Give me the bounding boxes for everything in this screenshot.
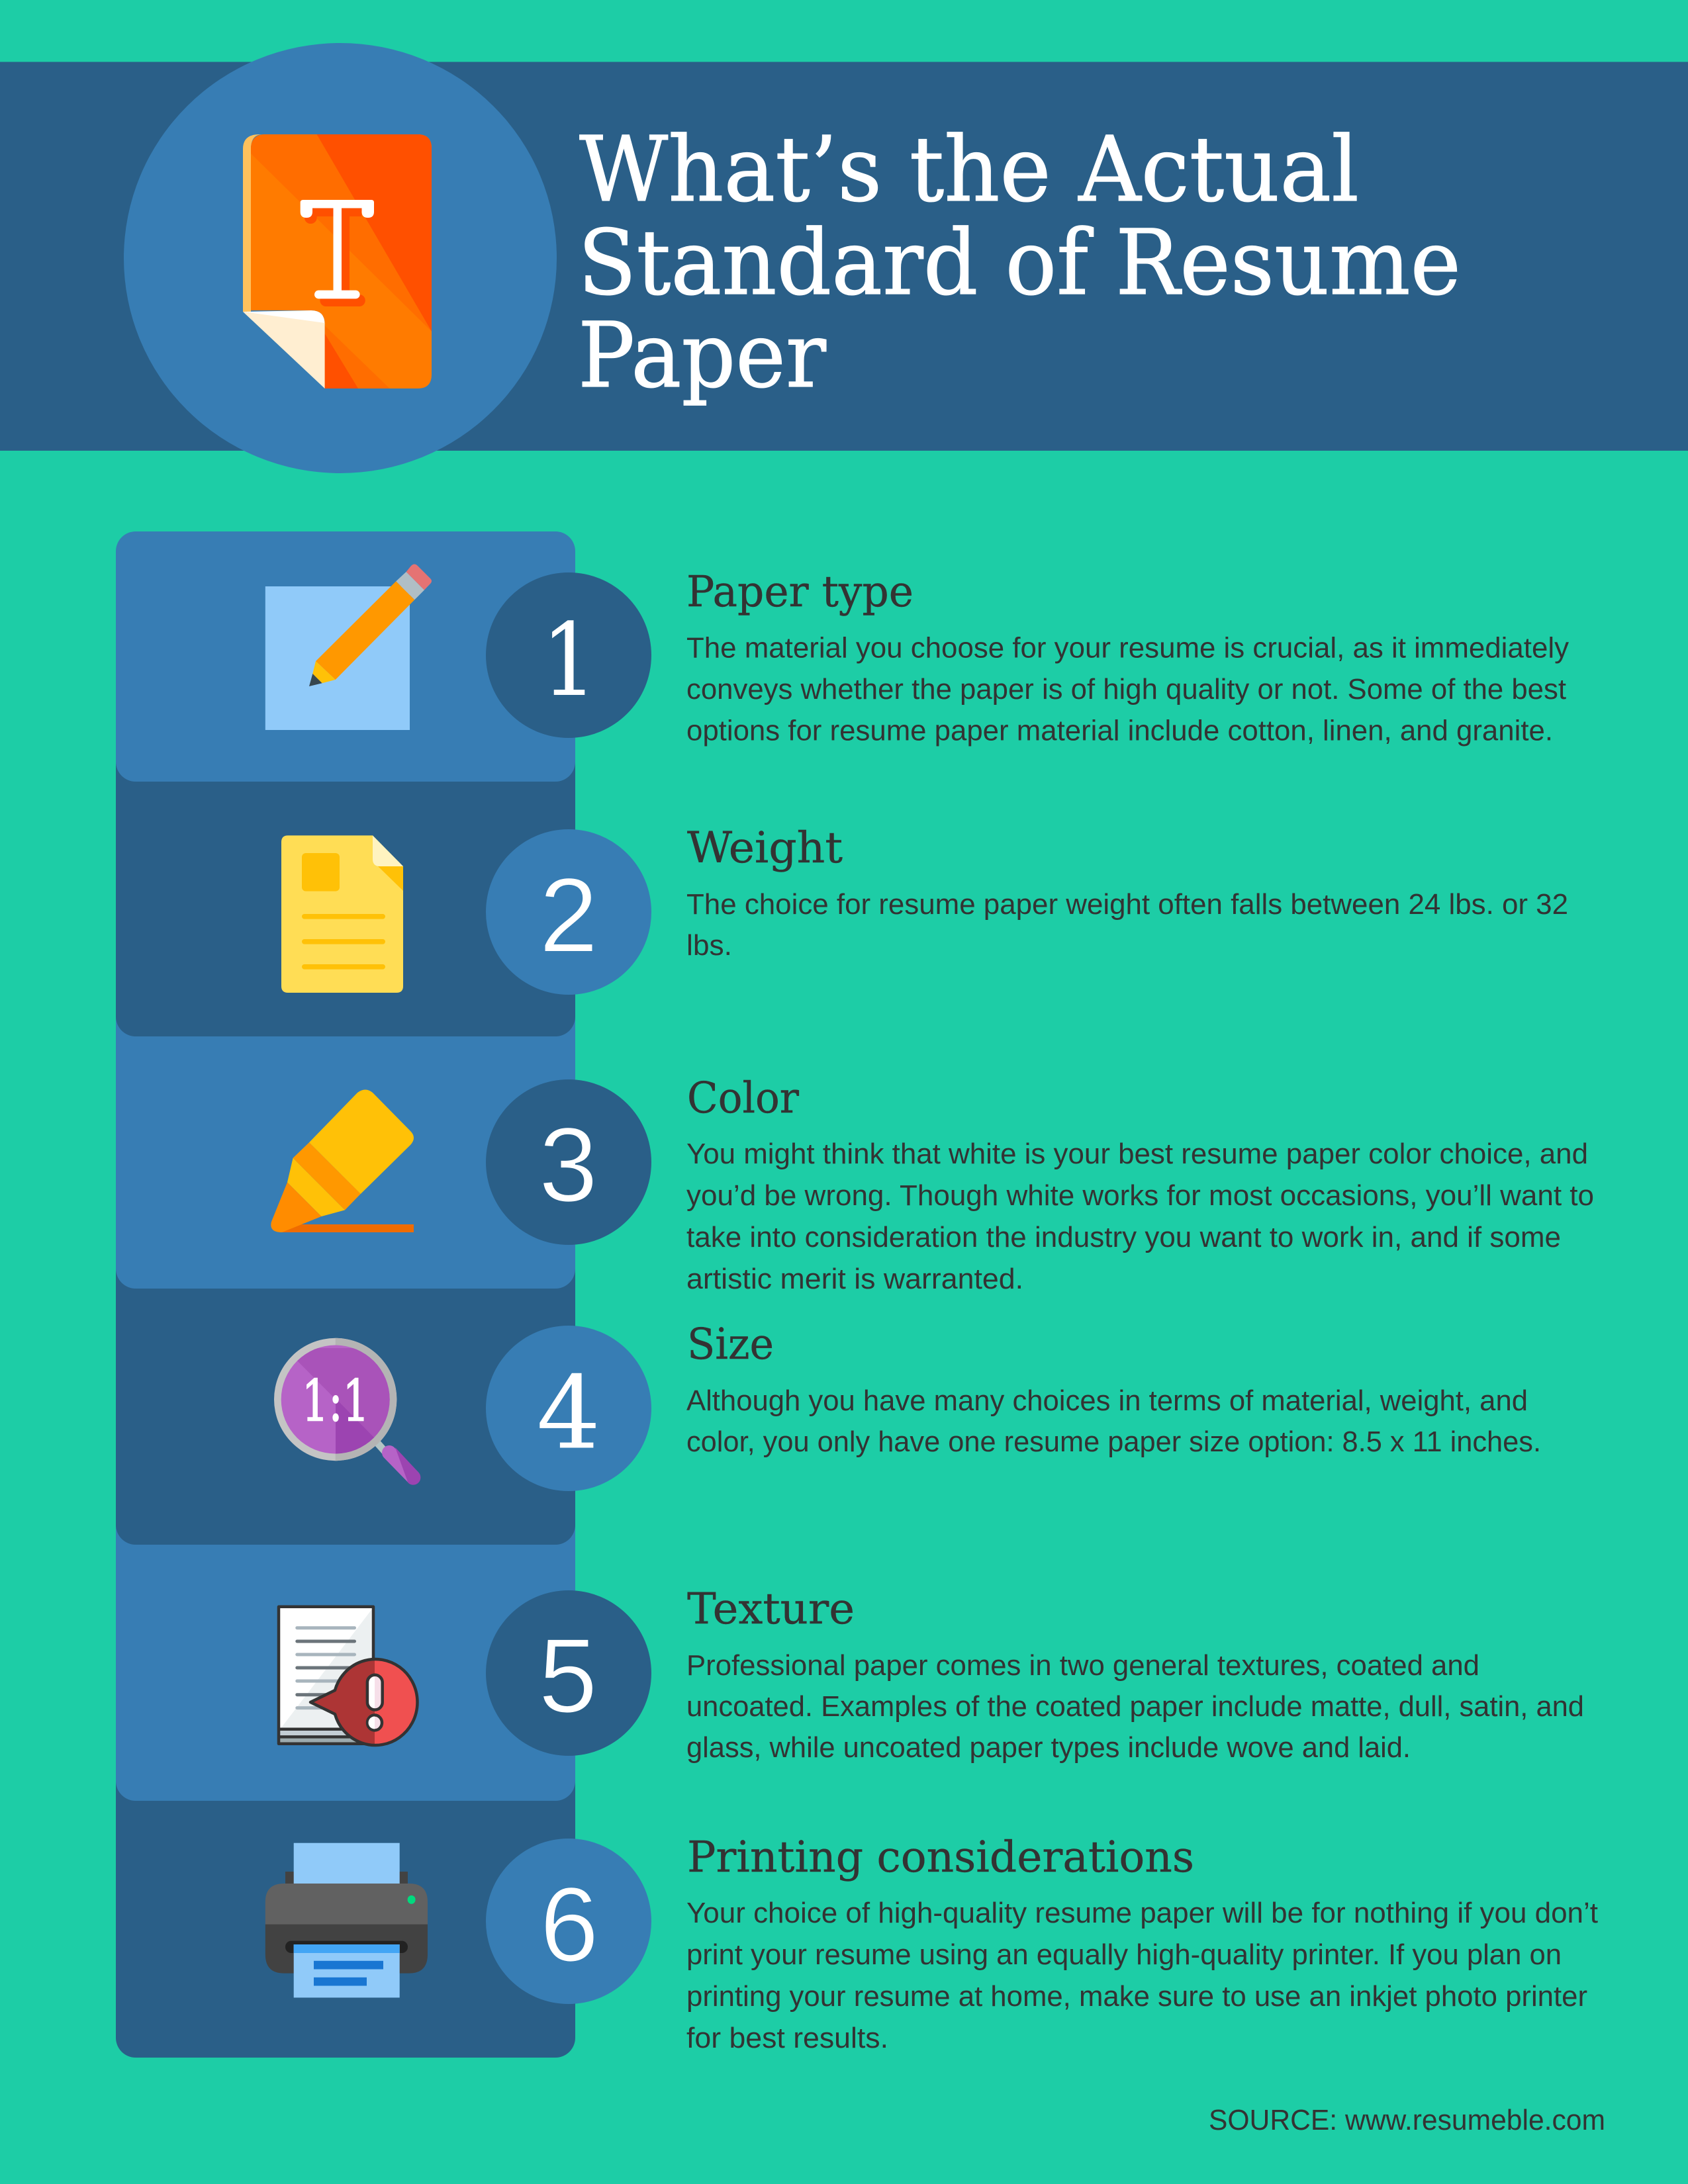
number 1 [486, 572, 651, 738]
text block: weight: The choice for resume paper weight often falls between 24 lbs. or 32 [686, 888, 1568, 921]
text block: weight [686, 823, 1568, 962]
text block: texture: uncoated. Examples of the coated paper include matte, dull, satin, and [686, 1690, 1584, 1723]
title: Paper [578, 304, 827, 408]
text block: paper type [686, 567, 1569, 747]
panel: step 5 texture [116, 1498, 651, 1801]
text block: printing considerations: Your choice of high-quality resume paper will be for nothing if you don’t [686, 1897, 1598, 1929]
text block: paper type: The material you choose for your resume is crucial, as it immediately [686, 631, 1569, 664]
text block: paper type: options for resume paper material include cotton, linen, and granite. [686, 715, 1553, 747]
panel: step 6 printing [116, 1754, 651, 2058]
icon: printer [265, 1843, 428, 1997]
icon: folded orange document [243, 134, 432, 388]
number 3: 3 [539, 1105, 598, 1224]
text block: weight: Weight [687, 823, 843, 873]
text block: printing considerations [686, 1833, 1598, 2054]
text block: size: Although you have many choices in terms of material, weight, and [686, 1385, 1528, 1417]
text block: color: take into consideration the industry you want to work in, and if some [686, 1221, 1561, 1253]
title: What’s the Actual [579, 118, 1359, 222]
number 2: 2 [539, 856, 598, 974]
text block: weight: lbs. [686, 929, 732, 962]
text block: texture: Professional paper comes in two general textures, coated and [686, 1649, 1479, 1682]
header circle with document icon [124, 43, 557, 473]
number 1: 1 [541, 602, 597, 719]
panel: step 3 color [116, 990, 651, 1289]
icon: magnifier 1:1: 1:1 [302, 1369, 369, 1435]
title [578, 118, 1461, 408]
text block: printing considerations: print your resume using an equally high-quality printer. If you plan on [686, 1938, 1562, 1971]
source credit: SOURCE: www.resumeble.com [1209, 2104, 1605, 2136]
text block: color: Color [687, 1073, 800, 1123]
text block: texture: Texture [687, 1584, 855, 1634]
text block: texture: glass, while uncoated paper types include wove and laid. [686, 1731, 1411, 1764]
text block: color: artistic merit is warranted. [686, 1263, 1023, 1295]
title: Standard of Resume [578, 211, 1461, 316]
header band [0, 62, 1688, 451]
text block: texture [686, 1584, 1584, 1764]
text block: color: You might think that white is your best resume paper color choice, and [686, 1138, 1588, 1170]
text block: color [686, 1073, 1594, 1295]
text block: paper type: Paper type [686, 567, 914, 617]
text block: printing considerations: for best results. [686, 2022, 888, 2054]
text block: size: color, you only have one resume paper size option: 8.5 x 11 inches. [686, 1426, 1541, 1458]
panel: step 1 paper type [116, 531, 651, 782]
number 6 [486, 1839, 651, 2004]
panel: step 2 weight [116, 735, 651, 1036]
icon: yellow document [281, 835, 403, 993]
number 3 [486, 1079, 651, 1245]
icon: magnifier 1:1 [274, 1338, 420, 1485]
text block: size: Size [687, 1320, 774, 1369]
icon: document with alert bubble [279, 1607, 418, 1751]
number 6: 6 [540, 1865, 598, 1983]
text block: printing considerations: printing your resume at home, make sure to use an inkjet photo printer [686, 1980, 1587, 2013]
icon: pencil on paper [265, 564, 432, 730]
text block: color: you’d be wrong. Though white works for most occasions, you’ll want to [686, 1179, 1594, 1212]
icon: highlighter [271, 1089, 414, 1232]
number 4 [486, 1326, 651, 1491]
text block: size [686, 1320, 1541, 1458]
number 2 [486, 829, 651, 995]
number 4: 4 [537, 1354, 600, 1472]
number 5 [486, 1590, 651, 1756]
text block: paper type: conveys whether the paper is of high quality or not. Some of the best [686, 673, 1566, 705]
text block: printing considerations: Printing considerations [687, 1833, 1194, 1882]
panel: step 4 size [116, 1242, 651, 1545]
number 5: 5 [539, 1616, 597, 1735]
